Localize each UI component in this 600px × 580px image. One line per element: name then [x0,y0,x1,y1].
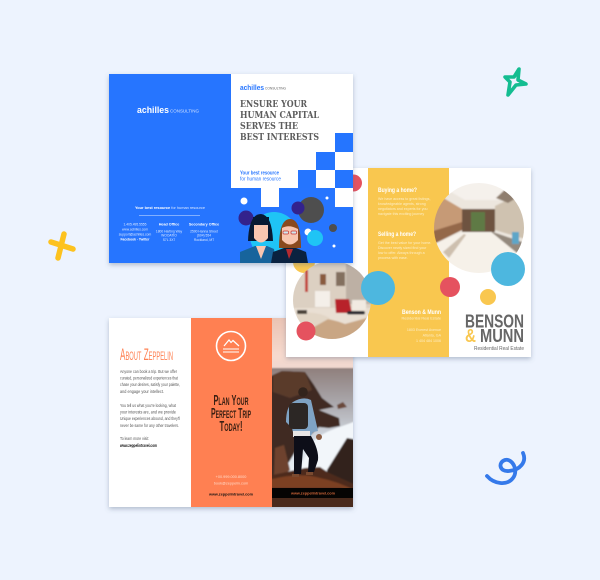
body copy: buying: negotiators and experts for you [378,207,428,211]
headline: ENSURE YOUR [240,99,307,110]
heading: Buying a home: Buying a home? [378,187,417,194]
contact block: 1 404 484 1006 [416,339,441,343]
body copy: You tell us what you're looking, what [120,403,177,408]
hiker figure [286,387,322,477]
photo: living room circle [293,263,371,339]
contact details: www.zeppelintravel.com [208,492,254,496]
cover logo [240,85,286,92]
orange panel [191,318,272,507]
cover logo: achilles [240,85,264,92]
orange panel: Perfect Trip [211,405,251,422]
contact columns: Head Office [159,222,179,226]
headline [240,99,319,143]
contact block: Atlanta, GA [423,334,442,338]
photo: hiker on sea cliff [272,318,353,507]
body copy: buying: We have access to great listings, [378,197,430,201]
logo: achilles consulting: CONSULTING [170,108,199,114]
heading: Selling a home: Selling a home? [378,231,416,238]
logo: achilles consulting: achilles [137,105,169,116]
cover logo: CONSULTING [265,86,286,90]
headline: BEST INTERESTS [240,132,319,143]
woman right [271,219,308,263]
panel: Benson & Munn real estate brochure [286,168,531,357]
contact columns [119,222,219,242]
body copy: your interests are, and we provide [120,410,176,414]
contact block: 1803 Everest Avenue [407,328,441,332]
body copy: Unique experiences abound, and they'll [120,416,180,421]
cover tagline [240,170,281,182]
decorative circle: blue left [361,271,395,305]
logo: Benson & Munn: Residential Real Estate [474,346,524,352]
contact columns: 1800 Harting Way [156,230,182,234]
website strip text: www.zeppelintravel.com [290,492,336,496]
body copy: selling: Discover newly sized find your [378,246,427,250]
body copy: To learn more visit: [120,436,149,441]
cover tagline: Your best resource [240,170,279,176]
decorative circle: red right [440,277,460,297]
headline: HUMAN CAPITAL [240,110,319,121]
headline: Plan your perfect trip today: Today! [220,418,242,435]
contact details: book@zeppelin.com [214,482,248,486]
photo: kitchen circle [434,183,524,273]
contact columns: Secondary Office [189,222,219,226]
panel: Achilles consulting brochure [109,74,353,263]
logo: Benson & Munn: & [465,326,476,346]
decorative circle: red top [345,174,362,192]
contact columns: 1.405.495.5555 [124,222,147,226]
tagline: Your best resource for human resource [135,205,205,210]
contact columns: (604) 554 [197,234,211,238]
contact columns: Facebook · Twitter [121,238,150,242]
icon: green star doodle [505,69,526,95]
headline: Plan your perfect trip today [211,392,251,435]
woman left [240,214,276,263]
decorative circle: yellow right [480,289,496,305]
contact block: Residential Real Estate [402,316,441,320]
contact columns: support@achilles.com [119,232,151,236]
contact details: +00.999.000.8000 [216,475,246,479]
contact columns: Rockland, MT [194,238,214,242]
decorative circle: yellow behind cover [293,251,315,273]
panel: Zeppelin travel brochure [109,314,358,512]
about text column: About Zeppelin [120,345,173,364]
logo: Benson & Munn [465,312,524,352]
yellow column text [378,187,442,343]
body copy: chase your desires, satisfy your palette, [120,382,180,387]
body copy: Anyone can book a trip. But we offer [120,369,177,374]
decorative circle: blue right [491,252,525,286]
body copy: buying: navigate this exciting journey [378,212,424,216]
illustration: two businesswomen and circles [238,196,337,263]
contact columns: 2500 Hanna Street [190,230,218,234]
headline: SERVES THE [240,121,298,132]
contact columns: S7L 3X7 [163,238,175,242]
logo: achilles consulting [137,105,199,116]
contact block: Benson & Munn [402,309,441,316]
icon: yellow cross doodle [51,234,73,258]
back cover text [119,105,219,242]
decorative circle: red bottom [296,322,316,340]
icon: blue squiggle doodle [487,453,524,483]
contact columns: WOOATIO [161,234,177,238]
yellow column [368,168,449,357]
body copy: selling: low to offer. Always through a [378,251,425,255]
body copy: buying: knowledgeable agents, strong [378,202,426,206]
contact columns: www.achilles.com [122,228,148,232]
logo: Benson & Munn: BENSON [465,312,524,332]
body copy: buying [378,197,430,216]
checker squares [261,133,353,207]
about text column [119,345,180,448]
logo: Benson & Munn: MUNN [480,326,524,346]
body copy: selling: process with ease. [378,256,408,260]
body copy: selling [378,241,431,260]
headline: Plan your perfect trip today: Plan Your [214,392,249,409]
body copy: www.zeppelintravel.com [119,443,157,448]
body copy [119,369,180,448]
body copy: selling: Get the best value for your home. [378,241,431,245]
cover white area [231,74,353,188]
cover tagline: for human resource [240,176,281,182]
contact block [402,309,442,343]
contact details [208,475,254,496]
body copy: and engage your intellect. [120,389,164,394]
body copy: curated, personalized experiences that [120,376,179,380]
body copy: never be same for any other travelers. [120,423,179,428]
icon: mountain logo [216,332,246,360]
